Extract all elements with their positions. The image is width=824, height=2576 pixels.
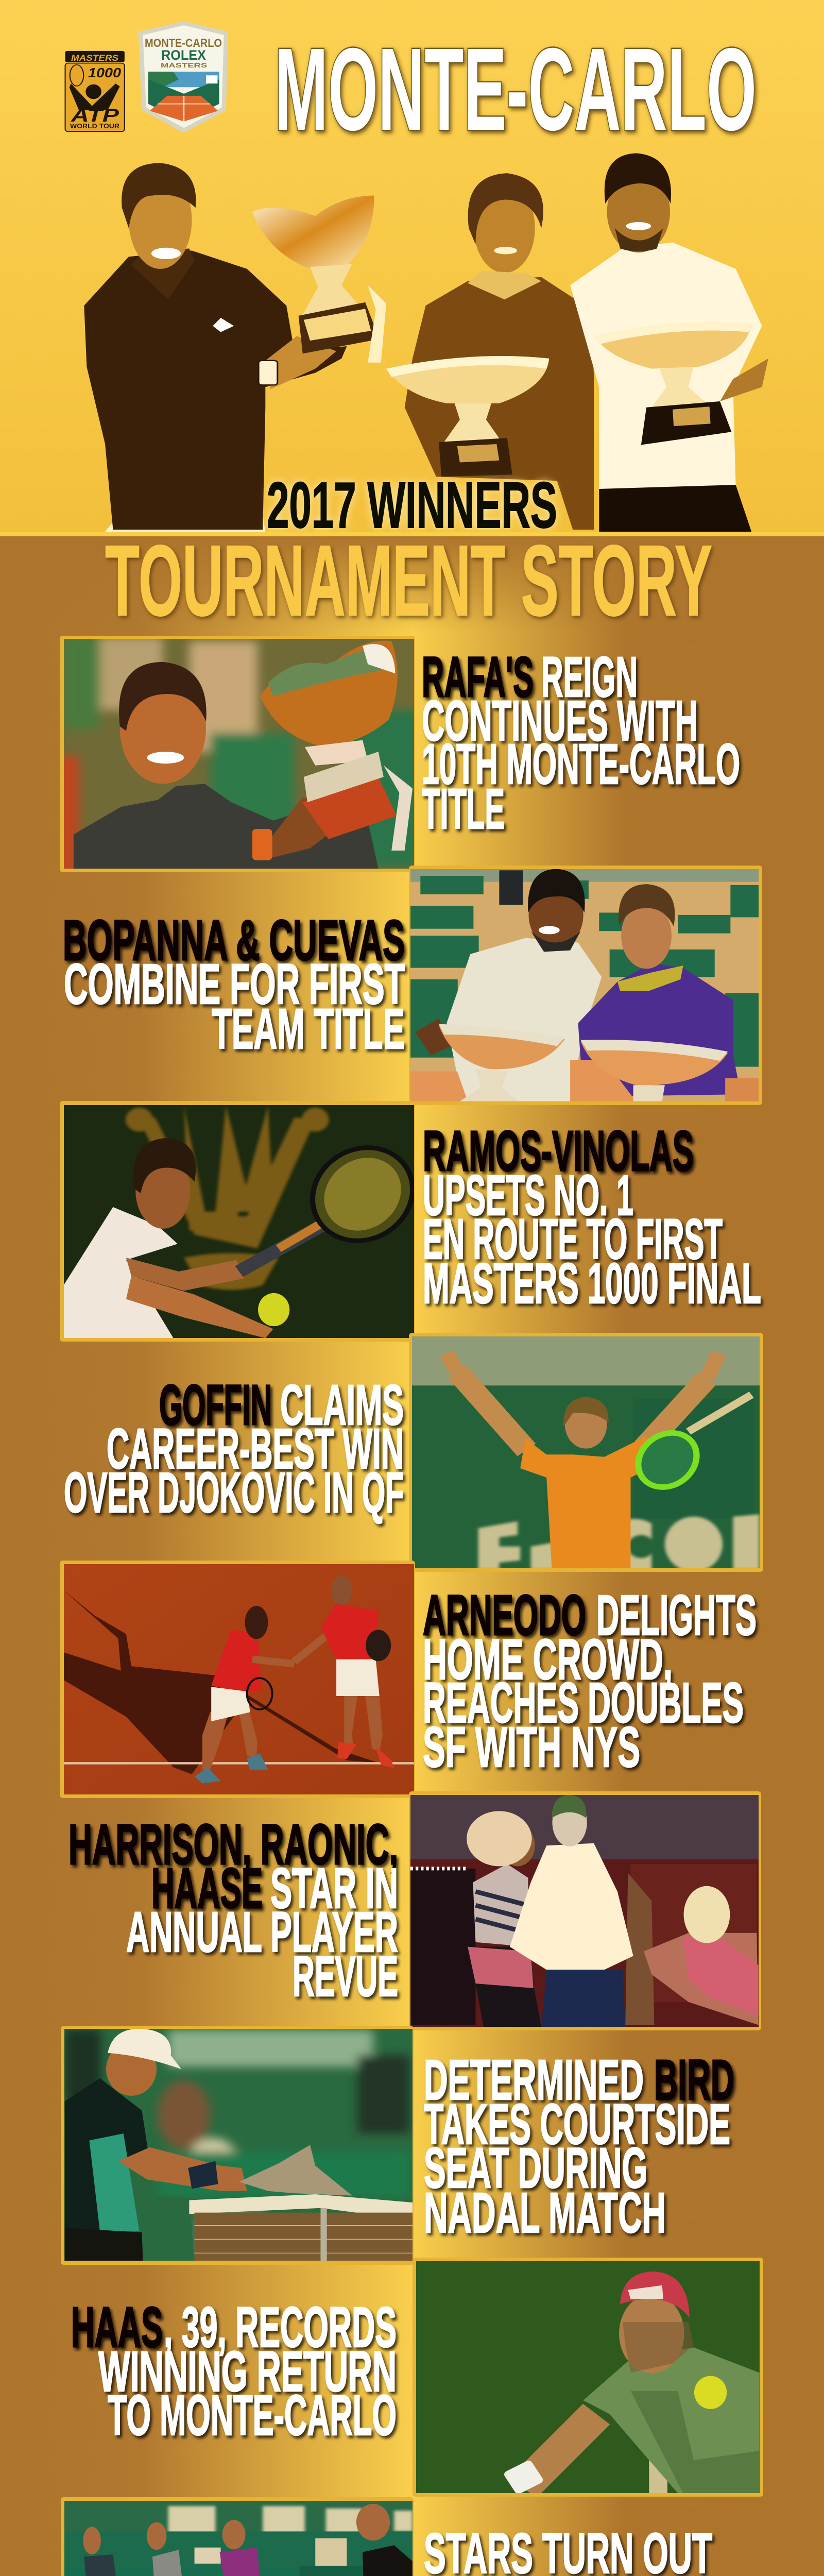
- headline: REVUE: [293, 1945, 398, 2008]
- headline: [422, 646, 740, 841]
- headline: OVER DJOKOVIC IN QF: [64, 1461, 404, 1524]
- panel: row 6 player revue: [68, 1790, 765, 2030]
- icon: Monte-Carlo Rolex Masters shield: [138, 21, 228, 133]
- headline: [64, 1374, 404, 1524]
- headline: HAASE: [151, 1857, 263, 1920]
- headline: COMBINE FOR FIRST: [64, 953, 405, 1016]
- headline: REIGN: [541, 646, 638, 709]
- photo: Nadal with trophy: [64, 639, 414, 869]
- photo frame: [60, 1101, 415, 1342]
- Bopanna: [570, 153, 768, 532]
- photo frame: [409, 1791, 761, 2030]
- headline: [424, 2048, 734, 2245]
- Nadal: [84, 163, 386, 532]
- photo: Arneodo and Nys handshake on clay: [58, 1561, 426, 1800]
- photo: player revue on stage: [407, 1790, 765, 2029]
- headline: [63, 909, 405, 1061]
- headline: ANNUAL PLAYER: [126, 1901, 398, 1964]
- panel: row 9 Amade: [58, 2497, 761, 2576]
- panel: header: [0, 0, 824, 541]
- headline: SF WITH NYS: [423, 1716, 640, 1779]
- photo frame: [413, 2258, 763, 2497]
- photo frame: [61, 2497, 414, 2576]
- text: shield wording: MASTERS: [161, 62, 207, 69]
- headline: CAREER-BEST WIN: [107, 1417, 404, 1481]
- panel: row 4 Goffin: [64, 1330, 765, 1574]
- headline: UPSETS NO. 1: [423, 1164, 633, 1227]
- photo frame: [60, 1561, 415, 1798]
- text: logo wording: 1000: [88, 65, 122, 80]
- headline: [68, 1813, 398, 2008]
- text: logo wording: [70, 53, 122, 130]
- headline: WINNING RETURN: [98, 2340, 397, 2403]
- headline: TO MONTE-CARLO: [108, 2384, 397, 2447]
- headline: , 39, RECORDS: [164, 2296, 397, 2359]
- photo: Goffin celebrating: [407, 1330, 765, 1574]
- photo: stars on court for charity: [58, 2497, 426, 2576]
- text: logo wording: WORLD TOUR: [70, 122, 120, 130]
- panel: row 5 Arneodo: [58, 1561, 757, 1800]
- photo: Ramos-Vinolas forehand: [64, 1105, 414, 1338]
- headline: SEAT DURING: [424, 2137, 647, 2200]
- headline: CLAIMS: [280, 1374, 404, 1437]
- heading: 2017 winners: 2017 WINNERS: [267, 469, 557, 541]
- headline: TEAM TITLE: [212, 997, 405, 1061]
- photo frame: [409, 866, 762, 1105]
- headline: GOFFIN: [159, 1374, 272, 1437]
- headline: STAR IN: [270, 1857, 398, 1920]
- photo: ball boy with bird on net: [58, 2023, 426, 2267]
- icon: ATP Masters 1000 logo: [65, 51, 125, 131]
- panel: tournament story background: [0, 532, 824, 2576]
- panel: row 1 Rafa: [58, 632, 740, 876]
- text: logo wording: ATP: [71, 105, 119, 126]
- photo: Haas reaching for ball: [410, 2258, 767, 2497]
- photo frame: [60, 636, 415, 872]
- headline: BIRD: [654, 2048, 734, 2112]
- headline: [423, 1120, 761, 1315]
- photo frame: [409, 1333, 763, 1572]
- Cuevas: [386, 173, 594, 530]
- headline: BOPANNA & CUEVAS: [63, 909, 405, 972]
- headline: HAAS: [71, 2296, 163, 2359]
- photo frame: [61, 2026, 414, 2265]
- headline: TITLE: [422, 777, 505, 841]
- text: shield wording: [145, 37, 222, 69]
- headline: [423, 1584, 757, 1779]
- headline: DETERMINED: [424, 2048, 644, 2112]
- headline: HARRISON, RAONIC,: [68, 1813, 398, 1876]
- text: shield wording: MONTE-CARLO: [145, 37, 222, 49]
- panel: row 7 bird: [58, 2023, 734, 2267]
- text: shield wording: ROLEX: [161, 47, 206, 63]
- headline: [71, 2296, 397, 2447]
- headline: ARNEODO: [423, 1584, 586, 1647]
- text: logo wording: MASTERS: [71, 53, 119, 63]
- panel: row 8 Haas: [71, 2258, 767, 2497]
- panel: row 2 Bopanna and Cuevas: [63, 866, 765, 1106]
- photo: 2017 winners with trophies: [84, 153, 768, 532]
- headline: RAFA'S: [422, 646, 534, 709]
- photo: Bopanna and Cuevas with trophies: [407, 867, 765, 1106]
- panel: row 3 Ramos-Vinolas: [58, 1097, 761, 1345]
